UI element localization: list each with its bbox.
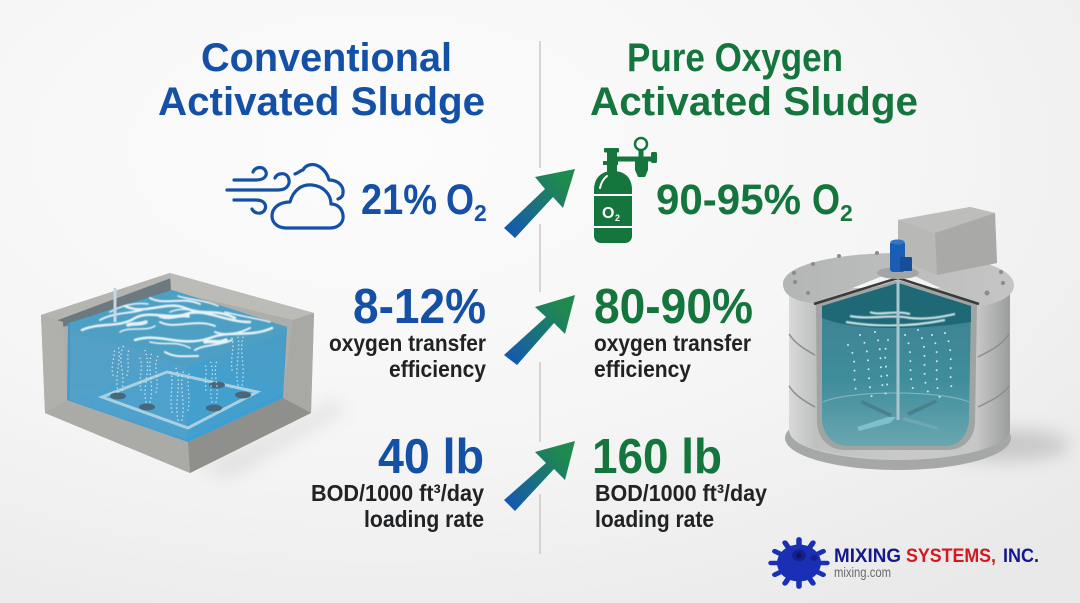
icon: wind and cloud	[227, 165, 343, 228]
cutaway interior	[816, 280, 977, 450]
stat: 90-95% O2: O	[812, 176, 840, 224]
stat: pure oxygen loading rate: loading rate	[595, 506, 714, 532]
water surface foam	[846, 312, 955, 326]
icon: gear	[771, 539, 827, 587]
title: pure oxygen: Activated Sludge	[590, 80, 918, 124]
motor and hub	[877, 240, 919, 279]
stat: 90-95% O2: 90-95%	[656, 176, 801, 224]
title: conventional	[158, 36, 485, 124]
aeration pipe grid	[102, 372, 257, 428]
bubbles	[848, 330, 952, 398]
icon: oxygen cylinder: 2	[615, 213, 620, 223]
tank base ring	[785, 404, 1011, 470]
stat: conventional loading rate: BOD/1000 ft³/day	[311, 480, 484, 506]
illustration: concrete aeration basin	[41, 273, 345, 478]
stat: pure oxygen transfer efficiency: efficiency	[594, 356, 691, 382]
logo: Mixing Systems: INC.	[1003, 546, 1039, 567]
stat: 21% O2: 2	[474, 200, 487, 226]
stat: pure oxygen loading rate: 160 lb	[592, 430, 722, 484]
diffusers	[110, 382, 251, 412]
stat: conventional loading rate: 40 lb	[378, 430, 484, 484]
title: conventional: Activated Sludge	[158, 80, 485, 124]
water surface with foam	[70, 290, 287, 367]
tank seams	[789, 334, 1009, 407]
floor line	[823, 393, 969, 402]
arrow: air to oxygen	[504, 169, 575, 238]
lid bolts	[792, 251, 1005, 296]
logo: Mixing Systems	[771, 539, 1039, 587]
logo: Mixing Systems: MIXING	[834, 546, 901, 567]
stat: conventional transfer efficiency: efficiency	[389, 356, 486, 382]
logo: Mixing Systems: mixing.com	[834, 564, 891, 580]
arrow: transfer efficiency	[504, 295, 575, 365]
icon: oxygen cylinder	[594, 138, 657, 243]
stat: 21% O2	[361, 176, 487, 226]
title: pure oxygen	[590, 36, 918, 124]
icon: oxygen cylinder: O	[602, 205, 614, 222]
arrow: loading rate	[504, 441, 575, 511]
center divider	[539, 41, 541, 554]
lid	[783, 253, 1014, 306]
stat: conventional transfer efficiency: 8-12%	[353, 280, 486, 334]
stat: 90-95% O2: 2	[840, 200, 853, 226]
equipment housing	[898, 207, 997, 275]
logo: Mixing Systems: SYSTEMS,	[906, 546, 996, 567]
shaft	[896, 280, 900, 420]
stat: conventional loading rate	[311, 430, 484, 532]
stat: pure oxygen loading rate: BOD/1000 ft³/day	[595, 480, 767, 506]
illustration: covered pure oxygen reactor	[783, 207, 1070, 470]
stat: 21% O2: O	[446, 176, 474, 224]
stat: pure oxygen transfer efficiency: 80-90%	[594, 280, 753, 334]
stat: pure oxygen loading rate	[592, 430, 767, 532]
stat: conventional transfer efficiency: oxygen transfer	[329, 330, 486, 356]
stat: conventional transfer efficiency	[329, 280, 486, 382]
stat: 21% O2: 21%	[361, 176, 437, 224]
stat: pure oxygen transfer efficiency: oxygen transfer	[594, 330, 751, 356]
title: pure oxygen: Pure Oxygen	[627, 36, 843, 80]
bubble plumes	[112, 332, 244, 420]
stat: pure oxygen transfer efficiency	[594, 280, 753, 382]
impeller	[857, 400, 938, 431]
stat: conventional loading rate: loading rate	[364, 506, 484, 532]
title: conventional: Conventional	[201, 36, 452, 80]
